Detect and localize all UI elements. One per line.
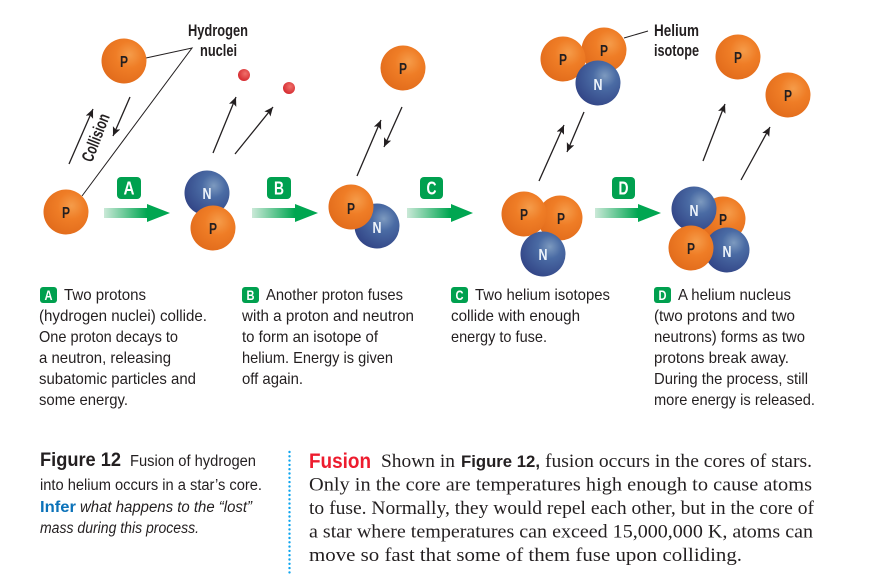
text block: step B: helium. Energy is given [242,350,393,367]
proton: top: P [120,54,128,71]
text block: step A: (hydrogen nuclei) collide. [39,308,207,325]
text block: step A: subatomic particles and [39,371,196,388]
text block: step C: Two helium isotopes [475,287,610,304]
proton: incoming B [380,46,426,90]
proton: incoming B: P [399,61,407,78]
escaping protons: P [784,88,792,105]
text block: step B: off again. [242,371,303,388]
arrows: escaping protons [703,104,770,180]
text block: step B: Another proton fuses [266,287,403,304]
label: Helium isotope: isotope [654,41,699,60]
arrow: step D [595,204,661,222]
arrows: step B collision [357,107,402,176]
text block: step C: energy to fuse. [451,329,547,346]
helium isotope: top: P [600,43,608,60]
figure caption: mass during this process. [40,520,199,537]
text block: step D: more energy is released. [654,392,815,409]
text block: step A: some energy. [39,392,128,409]
helium nucleus [668,186,750,272]
label: Helium isotope: Helium [654,21,699,40]
badge: A [117,177,141,199]
text block: step A: a neutron, releasing [39,350,171,367]
text block: step D: neutrons) forms as two [654,329,805,346]
body text: Fusion: move so fast that some of them fuse upon colliding. [309,546,742,566]
neutron-proton pair: N [202,186,212,203]
badge: B [267,177,291,199]
label: Collision: Collision [78,111,114,164]
arrow: step A [104,204,170,222]
text block: step B [241,287,414,388]
label: Hydrogen nuclei: Hydrogen [188,21,248,40]
text block: step A: A [44,288,53,303]
helium isotope: result of B: N [372,220,382,237]
badge: C: C [426,178,436,198]
label: Helium isotope [624,21,699,60]
dotted divider [288,452,291,576]
text block: step B: B [246,288,255,303]
figure caption: Figure 12 [40,450,121,471]
escaping protons [716,34,810,118]
body text: Fusion [309,450,815,566]
helium isotope: bottom [502,192,582,276]
text block: step A: Two protons [64,287,146,304]
collision arrows [69,97,130,164]
text block: step D: protons break away. [654,350,789,367]
body text: Fusion: Only in the core are temperatures high enough to cause atoms [309,476,812,496]
proton: bottom [44,190,88,234]
leader lines: hydrogen nuclei [82,48,192,196]
helium nucleus: N [722,244,732,261]
particles released: step A [238,69,295,94]
helium nucleus: P [687,241,695,258]
body text: Fusion: Shown in [381,452,455,472]
proton: top [102,38,146,84]
badge: A: A [124,178,134,198]
arrow: step C [407,204,473,222]
text block: step A [39,287,207,409]
text block: step D: A helium nucleus [678,287,791,304]
figure caption: into helium occurs in a star’s core. [40,477,262,494]
helium isotope: bottom: N [538,247,548,264]
badge: D: D [618,178,628,198]
helium isotope: top [540,28,626,106]
figure caption: Infer [40,499,76,516]
figure caption [40,450,262,537]
badge: D [612,177,635,199]
text block: step B: with a proton and neutron [241,308,414,325]
helium nucleus: N [690,203,698,220]
text block: step D: (two protons and two [654,308,795,325]
helium isotope: top: P [559,52,567,69]
helium nucleus: P [719,212,727,229]
text block: step A: One proton decays to [39,329,178,346]
proton: bottom: P [62,205,70,222]
badge: C [420,177,443,199]
body text: Fusion: to fuse. Normally, they would repel each other, but in the core of [309,499,815,519]
neutron-proton pair [184,170,236,250]
text block: step C [451,287,610,346]
body text: Fusion: a star where temperatures can exceed 15,000,000 K, atoms can [309,522,813,542]
helium isotope: result of B: P [347,201,355,218]
body text: Fusion: Fusion [309,450,371,473]
escaping protons: P [734,50,742,67]
text block: step D: D [658,288,667,303]
badge: B: B [274,178,284,198]
text block: step C: C [456,288,464,303]
label: Hydrogen nuclei [188,21,248,60]
figure caption: Fusion of hydrogen [130,453,256,470]
arrows: step C collision [539,112,584,181]
text block: step D [654,287,815,409]
helium isotope: result of B [328,184,400,248]
neutron-proton pair: P [209,221,217,238]
label: Hydrogen nuclei: nuclei [200,41,237,60]
arrow: step B [252,204,318,222]
text block: step B: to form an isotope of [242,329,379,346]
body text: Fusion: Figure 12, [461,453,540,471]
figure caption: what happens to the “lost” [80,499,253,516]
helium isotope: bottom: P [520,207,528,224]
text block: step D: During the process, still [654,371,808,388]
helium isotope: bottom: P [557,211,565,228]
body text: Fusion: fusion occurs in the cores of stars. [545,452,812,472]
arrows: particles released [213,97,273,154]
helium isotope: top: N [594,77,602,94]
text block: step C: collide with enough [451,308,580,325]
